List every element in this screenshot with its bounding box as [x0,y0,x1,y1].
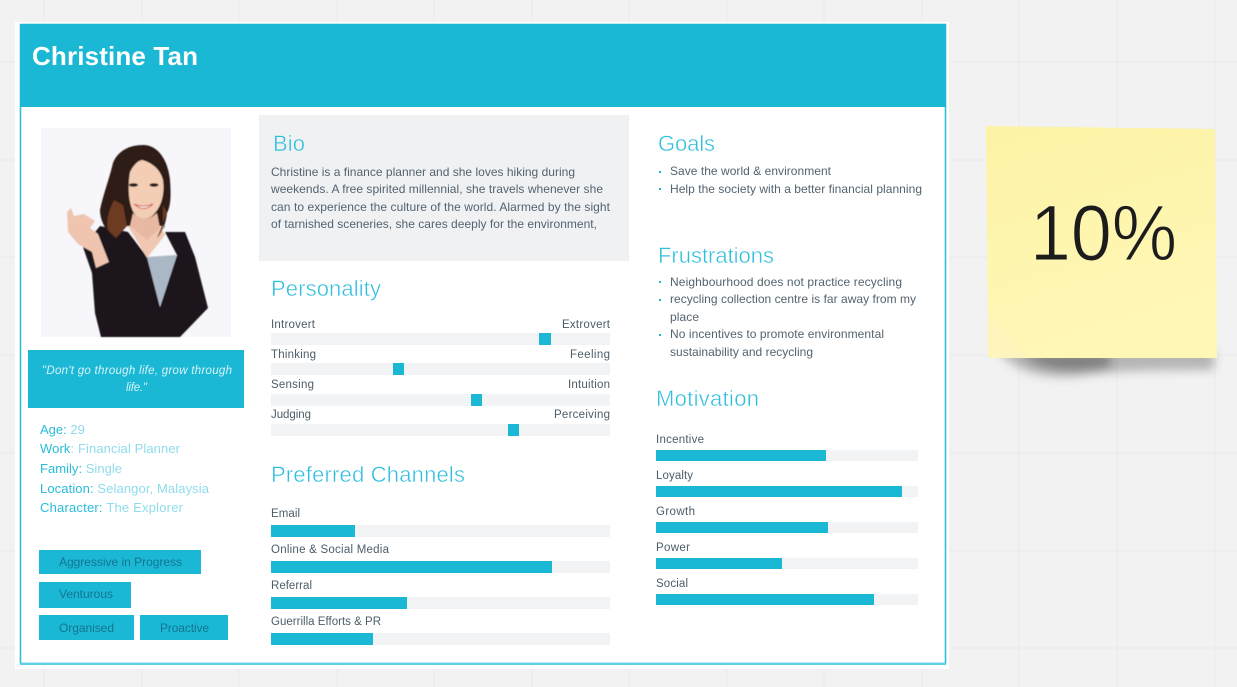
slider: sensing to intuition [271,379,610,406]
list: goals: Help the society with a better financial planning [670,182,922,196]
bar: growth: Growth [656,506,695,518]
slider: sensing to intuition: Sensing [271,379,314,391]
quote callout: "Don't go through life, grow through [42,365,232,377]
bar: incentive: Incentive [656,434,704,446]
slider: thinking to feeling: Thinking [271,349,316,361]
heading: preferred channels: Preferred Channels [271,462,465,487]
list: goals: Save the world & environment [670,164,832,178]
bar: power [656,542,918,569]
bar: referral [271,580,610,609]
list: goals [659,164,922,196]
bar: social [656,578,918,605]
slider: introvert to extrovert [271,319,611,345]
text block: bio copy: of tarnished sceneries, she cares deeply for the environment, [271,217,597,231]
panel: personality [271,276,611,436]
panel: frustrations [658,243,916,359]
panel: goals [658,131,922,196]
text block: demographics: Age: 29 [40,422,85,437]
bar: email [271,508,610,537]
header banner [20,24,946,107]
text block: demographics: Family: Single [40,461,122,476]
heading: personality: Personality [271,276,381,301]
trait tags: Venturous [59,587,113,601]
slider: introvert to extrovert: Extrovert [562,319,611,331]
bar: referral: Referral [271,580,312,592]
trait tags: Organised [59,621,114,635]
bar: power: Power [656,542,690,554]
heading: frustrations: Frustrations [658,243,774,268]
text block: demographics [40,422,210,515]
quote callout [28,350,244,408]
text block: bio copy [270,165,611,231]
slider: judging to perceiving: Judging [271,409,311,421]
slider: sensing to intuition: Intuition [568,379,610,391]
sticky note: 10% [986,126,1217,377]
photo: portrait of Christine [41,128,231,337]
list: frustrations: No incentives to promote environmental [670,327,884,341]
text block: demographics: Work: Financial Planner [40,441,181,456]
list: frustrations: Neighbourhood does not practice recycling [670,275,902,289]
bar: online and social media [271,544,610,573]
text block: bio copy: weekends. A free spirited millennial, she travels whenever she [270,182,603,196]
bar: loyalty [656,470,918,497]
bar: online and social media: Online & Social Media [271,544,390,556]
panel: motivation [656,386,918,605]
bar: incentive [656,434,918,461]
bar: loyalty: Loyalty [656,470,693,482]
sticky note: 10%: 10% [1030,188,1177,277]
panel: bio [259,115,629,261]
trait tags [39,550,228,640]
text block: bio copy: Christine is a finance planner and she loves hiking during [271,165,575,179]
heading: goals: Goals [658,131,715,156]
text block: demographics: Location: Selangor, Malaysia [40,481,210,496]
slider: judging to perceiving: Perceiving [554,409,610,421]
list: frustrations: place [670,310,699,324]
heading: motivation: Motivation [656,386,759,411]
bar: social: Social [656,578,688,590]
text block: bio copy: can to experience the culture of the world. Alarmed by the sight [271,200,611,214]
slider: thinking to feeling: Feeling [570,349,610,361]
trait tags: Proactive [160,621,209,635]
list: frustrations [659,275,916,359]
trait tags: Aggressive in Progress [59,555,182,569]
bar: email: Email [271,508,300,520]
panel: preferred channels [271,462,610,645]
slider: judging to perceiving [271,409,610,436]
quote callout: life." [126,382,148,394]
title: persona name: Christine Tan [32,41,198,71]
text block: demographics: Character: The Explorer [40,500,184,515]
panel: persona card [15,22,949,669]
bar: guerrilla efforts and PR: Guerrilla Efforts & PR [271,616,381,628]
list: frustrations: sustainability and recycling [670,345,813,359]
list: frustrations: recycling collection centre is far away from my [670,292,916,306]
slider: introvert to extrovert: Introvert [271,319,316,331]
bar: growth [656,506,918,533]
slider: thinking to feeling [271,349,610,375]
heading: bio: Bio [273,131,305,156]
bar: guerrilla efforts and PR [271,616,610,645]
